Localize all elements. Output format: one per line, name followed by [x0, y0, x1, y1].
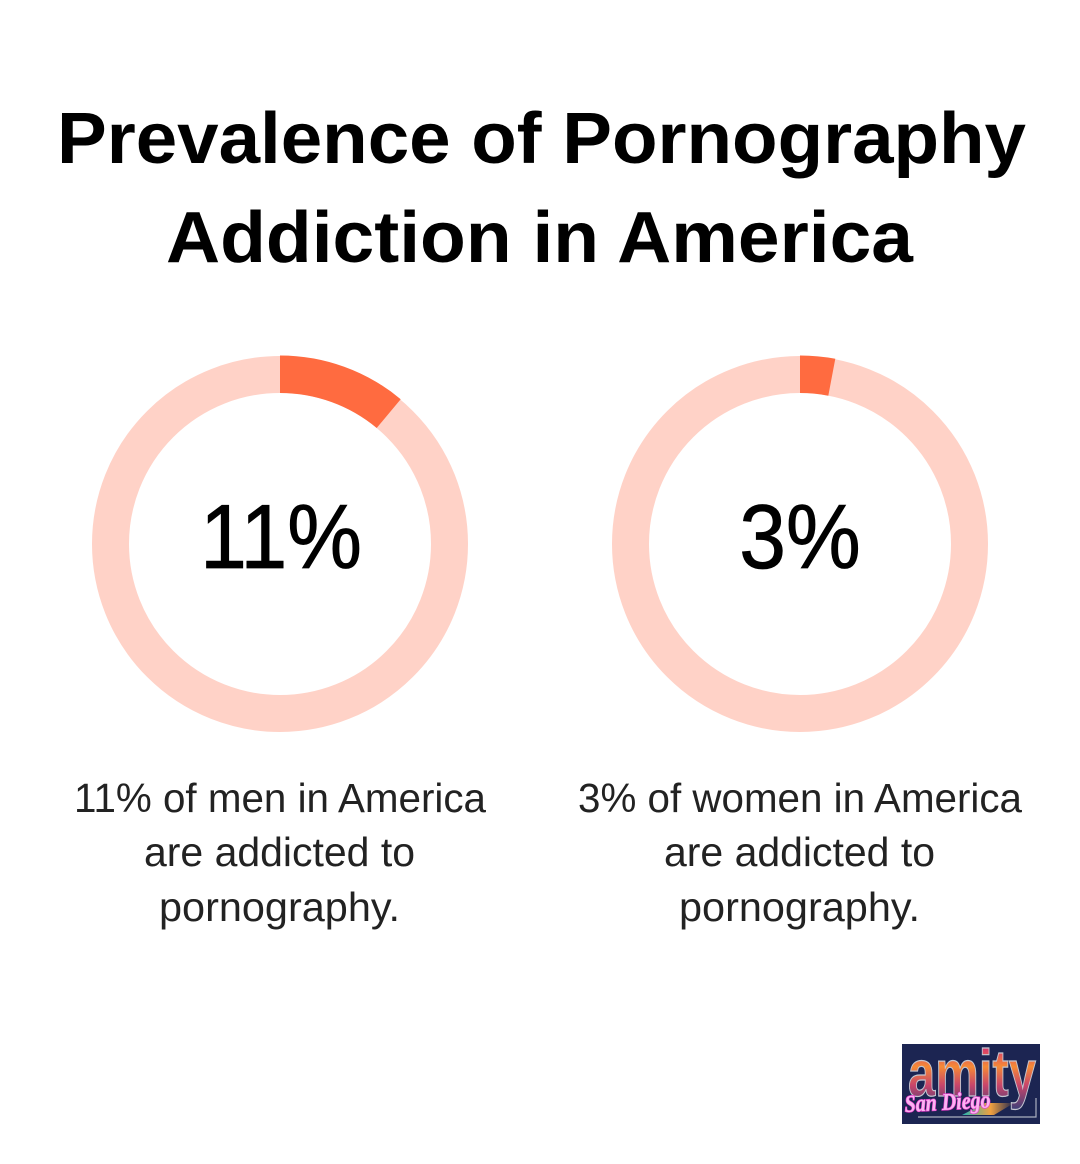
value: 11%: 11% — [200, 486, 362, 588]
title: Addiction in America — [166, 198, 914, 278]
caption: men — [74, 775, 486, 930]
title — [57, 99, 1026, 278]
logo: Amity San Diego: San Diego — [904, 1088, 991, 1118]
panel: women — [578, 355, 1022, 930]
donut chart: 3% women — [630, 355, 970, 714]
caption: women: 3% of women in America — [578, 775, 1022, 821]
caption: men: pornography. — [159, 884, 400, 930]
value: 3%: 3% — [739, 486, 861, 588]
caption: women — [578, 775, 1022, 930]
caption: women: are addicted to — [664, 829, 935, 875]
panel: men — [74, 356, 486, 930]
logo: Amity San Diego — [902, 1036, 1040, 1124]
infographic canvas — [62, 110, 1040, 1124]
caption: women: pornography. — [679, 884, 920, 930]
caption: men: are addicted to — [144, 829, 415, 875]
logo: Amity San Diego: amity — [908, 1036, 1036, 1110]
title: Prevalence of Pornography — [57, 99, 1026, 179]
donut chart: 11% men — [110, 356, 450, 714]
caption: men: 11% of men in America — [74, 775, 486, 821]
